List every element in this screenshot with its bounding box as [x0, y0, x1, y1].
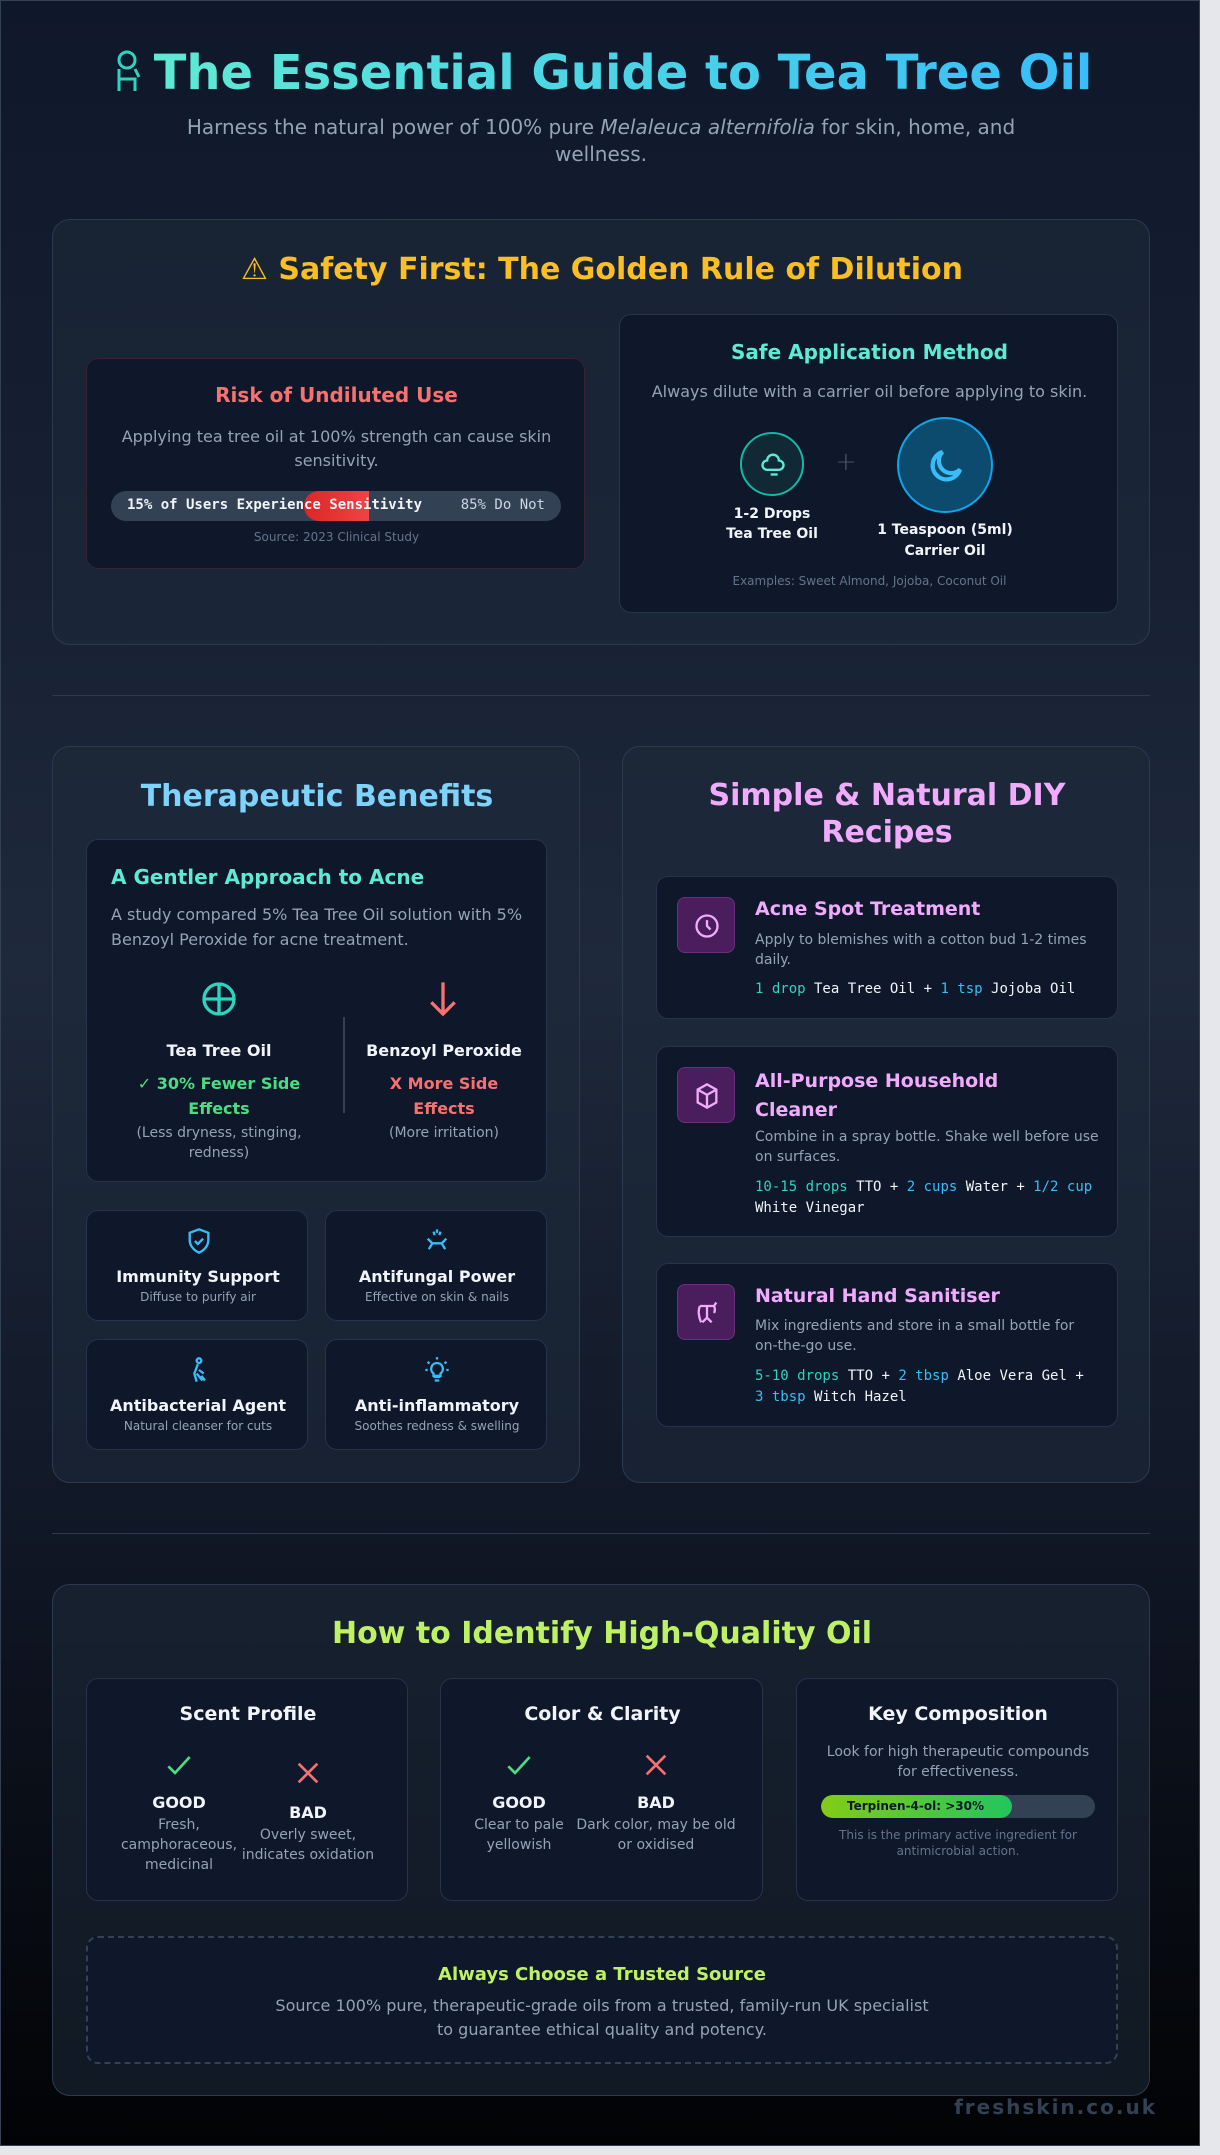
subtitle: Harness the natural power of 100% pure Melaleuca alternifolia for skin, home, and wellness. — [187, 115, 1015, 166]
card: acne comparison — [86, 839, 547, 1182]
icon: down arrow — [430, 982, 456, 1016]
heading: safe: Safe Application Method — [731, 340, 1008, 364]
heading: DIY: Simple & Natural DIY — [709, 778, 1065, 813]
recipe: hand sanitiser: Natural Hand Sanitiser — [755, 1285, 1000, 1307]
label: carrier — [877, 522, 1013, 559]
recipe: cleaner: All-Purpose Household Cleaner — [755, 1070, 998, 1121]
col: benzoyl: X More Side — [390, 1074, 498, 1093]
recipe: acne spot: 1 drop Tea Tree Oil + 1 tsp Jojoba Oil — [755, 981, 1075, 997]
card: antifungal: Effective on skin & nails — [365, 1290, 509, 1304]
panel: DIY recipes — [622, 746, 1150, 1483]
callout: trusted source: Source 100% pure, therapeutic-grade oils from a trusted, family-run UK specialist — [275, 1996, 929, 2015]
recipe: acne spot: Acne Spot Treatment — [755, 898, 980, 920]
recipe: hand sanitiser: Mix ingredients and store in a small bottle for on-the-go use. — [755, 1318, 1074, 1354]
col: tea tree — [136, 1041, 302, 1161]
icon: carrier circle — [897, 417, 993, 513]
col: tea tree: Tea Tree Oil — [167, 1041, 271, 1060]
recipe: acne spot: Apply to blemishes with a cotton bud 1-2 times daily. — [755, 932, 1087, 968]
card: antifungal: Antifungal Power — [359, 1267, 515, 1286]
examples: Examples: Sweet Almond, Jojoba, Coconut Oil — [732, 574, 1006, 588]
card: scent: Overly sweet, — [260, 1827, 356, 1843]
card: color: or oxidised — [618, 1837, 694, 1853]
card: composition: Key Composition — [868, 1703, 1048, 1725]
icon: tree person — [118, 50, 140, 91]
panel: quality — [52, 1584, 1150, 2096]
panel: therapeutic benefits — [52, 746, 580, 1483]
card: immunity: Immunity Support — [116, 1267, 280, 1286]
callout: trusted source: to guarantee ethical quality and potency. — [437, 2020, 767, 2039]
card: immunity: Diffuse to purify air — [140, 1290, 256, 1304]
card: color: Dark color, may be old — [576, 1817, 736, 1833]
bar: sensitivity: 85% Do Not — [461, 497, 545, 513]
heading: safety: ⚠ Safety First: The Golden Rule of Dilution — [241, 252, 963, 287]
footer: brand: freshskin.co.uk — [954, 2095, 1157, 2119]
col: benzoyl — [366, 1041, 522, 1141]
heading: acne: A Gentler Approach to Acne — [111, 865, 424, 889]
col: benzoyl: (More irritation) — [389, 1125, 499, 1141]
recipe: cleaner — [656, 1046, 1118, 1237]
heading: quality: How to Identify High-Quality Oil — [332, 1616, 872, 1651]
card: anti-inflammatory: Anti-inflammatory — [355, 1396, 519, 1415]
text: risk: Applying tea tree oil at 100% strength can cause skin sensitivity. — [122, 427, 551, 470]
col: tea tree: Effects — [188, 1099, 250, 1118]
card: scent: Scent Profile — [180, 1703, 316, 1725]
callout: trusted source: Always Choose a Trusted Source — [438, 1964, 766, 1985]
card: antibacterial: Natural cleanser for cuts — [124, 1419, 272, 1433]
card: color: BAD — [637, 1793, 675, 1812]
col: benzoyl: Effects — [413, 1099, 475, 1118]
card: scent: indicates oxidation — [242, 1847, 374, 1863]
col: tea tree: redness) — [189, 1145, 249, 1161]
col: benzoyl: Benzoyl Peroxide — [366, 1041, 522, 1060]
card: safe application — [619, 314, 1118, 613]
text: safe: Always dilute with a carrier oil before applying to skin. — [652, 382, 1087, 401]
heading: DIY: Recipes — [821, 815, 953, 850]
card: scent: Fresh, — [158, 1817, 200, 1833]
label: carrier: Carrier Oil — [904, 543, 986, 559]
icon: x — [298, 1762, 318, 1784]
card: risk — [86, 358, 585, 569]
card: scent: camphoraceous, — [121, 1837, 237, 1853]
card: color: Clear to pale — [474, 1817, 564, 1833]
card: immunity — [86, 1210, 308, 1321]
heading: therapeutic: Therapeutic Benefits — [141, 779, 493, 814]
label: drops — [726, 506, 818, 542]
card: composition: This is the primary active ingredient for antimicrobial action. — [839, 1828, 1077, 1858]
plus: + — [835, 447, 857, 477]
bar: sensitivity — [111, 491, 561, 521]
heading: DIY — [709, 778, 1066, 850]
col: tea tree: (Less dryness, stinging, — [136, 1125, 302, 1141]
card: anti-inflammatory — [325, 1339, 547, 1450]
icon: drops circle — [740, 432, 804, 496]
card: scent: GOOD — [152, 1793, 206, 1812]
card: color: Color & Clarity — [524, 1703, 681, 1725]
card: color: yellowish — [487, 1837, 551, 1853]
recipe: hand sanitiser: 3 tbsp Witch Hazel — [755, 1389, 907, 1405]
recipe: cleaner: Combine in a spray bottle. Shake well before use on surfaces. — [755, 1129, 1099, 1165]
card: scent: medicinal — [145, 1857, 213, 1873]
label: drops: Tea Tree Oil — [726, 526, 818, 542]
title: The Essential Guide to Tea Tree Oil — [154, 45, 1092, 101]
callout: trusted source — [86, 1936, 1118, 2064]
card: composition: Look for high therapeutic compounds for effectiveness. — [827, 1744, 1089, 1780]
bar: terpinen: Terpinen-4-ol: >30% — [847, 1799, 984, 1813]
panel: safety — [52, 219, 1150, 645]
card: composition — [796, 1678, 1118, 1901]
icon: check — [168, 1756, 191, 1775]
recipe: hand sanitiser: 5-10 drops TTO + 2 tbsp Aloe Vera Gel + — [755, 1368, 1084, 1384]
card: color — [440, 1678, 763, 1901]
card: color: GOOD — [492, 1793, 546, 1812]
bar: terpinen — [821, 1795, 1095, 1818]
recipe: acne spot — [656, 876, 1118, 1019]
heading: risk: Risk of Undiluted Use — [215, 383, 458, 407]
card: scent: BAD — [289, 1803, 327, 1822]
icon: tea tree — [202, 982, 236, 1016]
recipe: cleaner: 10-15 drops TTO + 2 cups Water + 1/2 cup White Vinegar — [755, 1179, 1092, 1216]
label: carrier: 1 Teaspoon (5ml) — [877, 522, 1013, 538]
source: Source: 2023 Clinical Study — [254, 530, 419, 544]
card: antifungal — [325, 1210, 547, 1321]
card: scent — [86, 1678, 408, 1901]
recipe: hand sanitiser — [656, 1263, 1118, 1427]
label: drops: 1-2 Drops — [734, 506, 810, 522]
card: anti-inflammatory: Soothes redness & swelling — [355, 1419, 519, 1433]
text: study: A study compared 5% Tea Tree Oil solution with 5% Benzoyl Peroxide for acne treatment. — [111, 905, 522, 949]
col: tea tree: ✓ 30% Fewer Side — [138, 1074, 300, 1093]
card: antibacterial: Antibacterial Agent — [110, 1396, 286, 1415]
bar: sensitivity: 15% of Users Experience Sensitivity — [127, 497, 422, 513]
card: antibacterial — [86, 1339, 308, 1450]
